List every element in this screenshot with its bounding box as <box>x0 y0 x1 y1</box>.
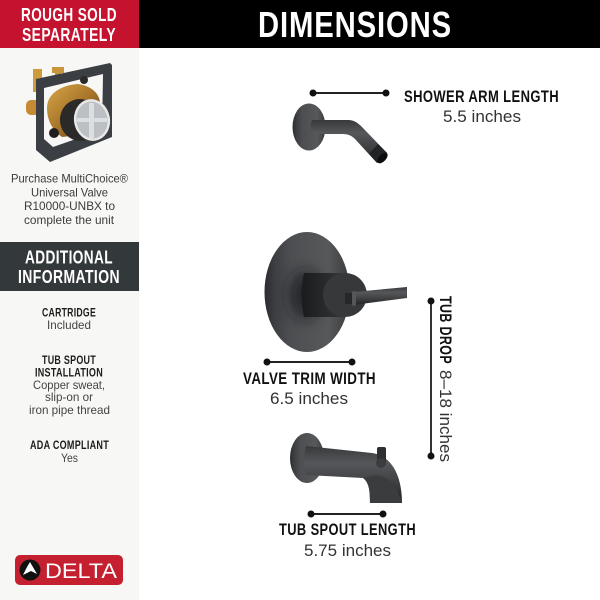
logo: delta <box>15 555 123 585</box>
panel: rough sold separately header: SEPARATELY <box>22 24 116 45</box>
text block: cartridge <box>42 306 96 332</box>
text block: tub spout installation: slip-on or <box>45 390 93 404</box>
text block: shower arm length: 5.5 inches <box>443 107 521 126</box>
text block: shower arm length <box>404 87 559 126</box>
text block: tub spout installation: TUB SPOUT <box>42 353 96 367</box>
text block: purchase note: Purchase MultiChoice® <box>11 172 128 186</box>
icon: tub spout <box>290 433 402 503</box>
logo: delta: DELTA <box>45 560 117 583</box>
arrow: valve trim width <box>264 358 356 366</box>
panel: additional information header: INFORMATION <box>18 266 120 287</box>
icon: rough-in valve <box>26 63 113 162</box>
text block: purchase note <box>11 172 128 227</box>
panel: rough sold separately header <box>0 0 139 48</box>
text block: tub drop: TUB DROP <box>436 296 455 364</box>
text block: purchase note: R10000-UNBX to <box>24 199 115 213</box>
panel: additional information header <box>0 242 139 291</box>
panel: dimensions header <box>139 0 600 48</box>
text block: tub drop <box>436 296 455 462</box>
arrow: tub drop <box>428 298 434 460</box>
icon: valve trim <box>264 232 407 352</box>
text block: valve trim width <box>243 369 376 408</box>
text block: ada compliant: Yes <box>61 451 78 465</box>
text block: valve trim width: 6.5 inches <box>270 389 348 408</box>
text block: tub spout installation <box>29 353 110 417</box>
text block: tub spout length: 5.75 inches <box>304 541 391 560</box>
text block: tub spout installation: iron pipe thread <box>29 403 110 417</box>
panel: additional information header: ADDITIONAL <box>25 246 113 268</box>
text block: cartridge: CARTRIDGE <box>42 306 96 320</box>
icon: shower arm <box>292 104 389 165</box>
text block: purchase note: complete the unit <box>24 213 115 227</box>
text block: tub spout installation: INSTALLATION <box>35 366 103 380</box>
text block: ada compliant: ADA COMPLIANT <box>30 438 109 452</box>
panel: dimensions header: DIMENSIONS <box>258 4 452 45</box>
text block: ada compliant <box>30 438 109 465</box>
arrow: shower arm length <box>310 90 390 96</box>
arrow: tub spout length <box>308 510 386 518</box>
text block: tub spout length: TUB SPOUT LENGTH <box>279 520 416 539</box>
text block: purchase note: Universal Valve <box>31 186 108 200</box>
text block: valve trim width: VALVE TRIM WIDTH <box>243 369 376 388</box>
text block: cartridge: Included <box>47 318 91 332</box>
text block: tub spout installation: Copper sweat, <box>33 378 105 392</box>
sidebar background <box>0 0 139 600</box>
text block: tub spout length <box>279 520 416 560</box>
text block: tub drop: 8–18 inches <box>436 370 455 462</box>
panel: rough sold separately header: ROUGH SOLD <box>21 4 117 25</box>
